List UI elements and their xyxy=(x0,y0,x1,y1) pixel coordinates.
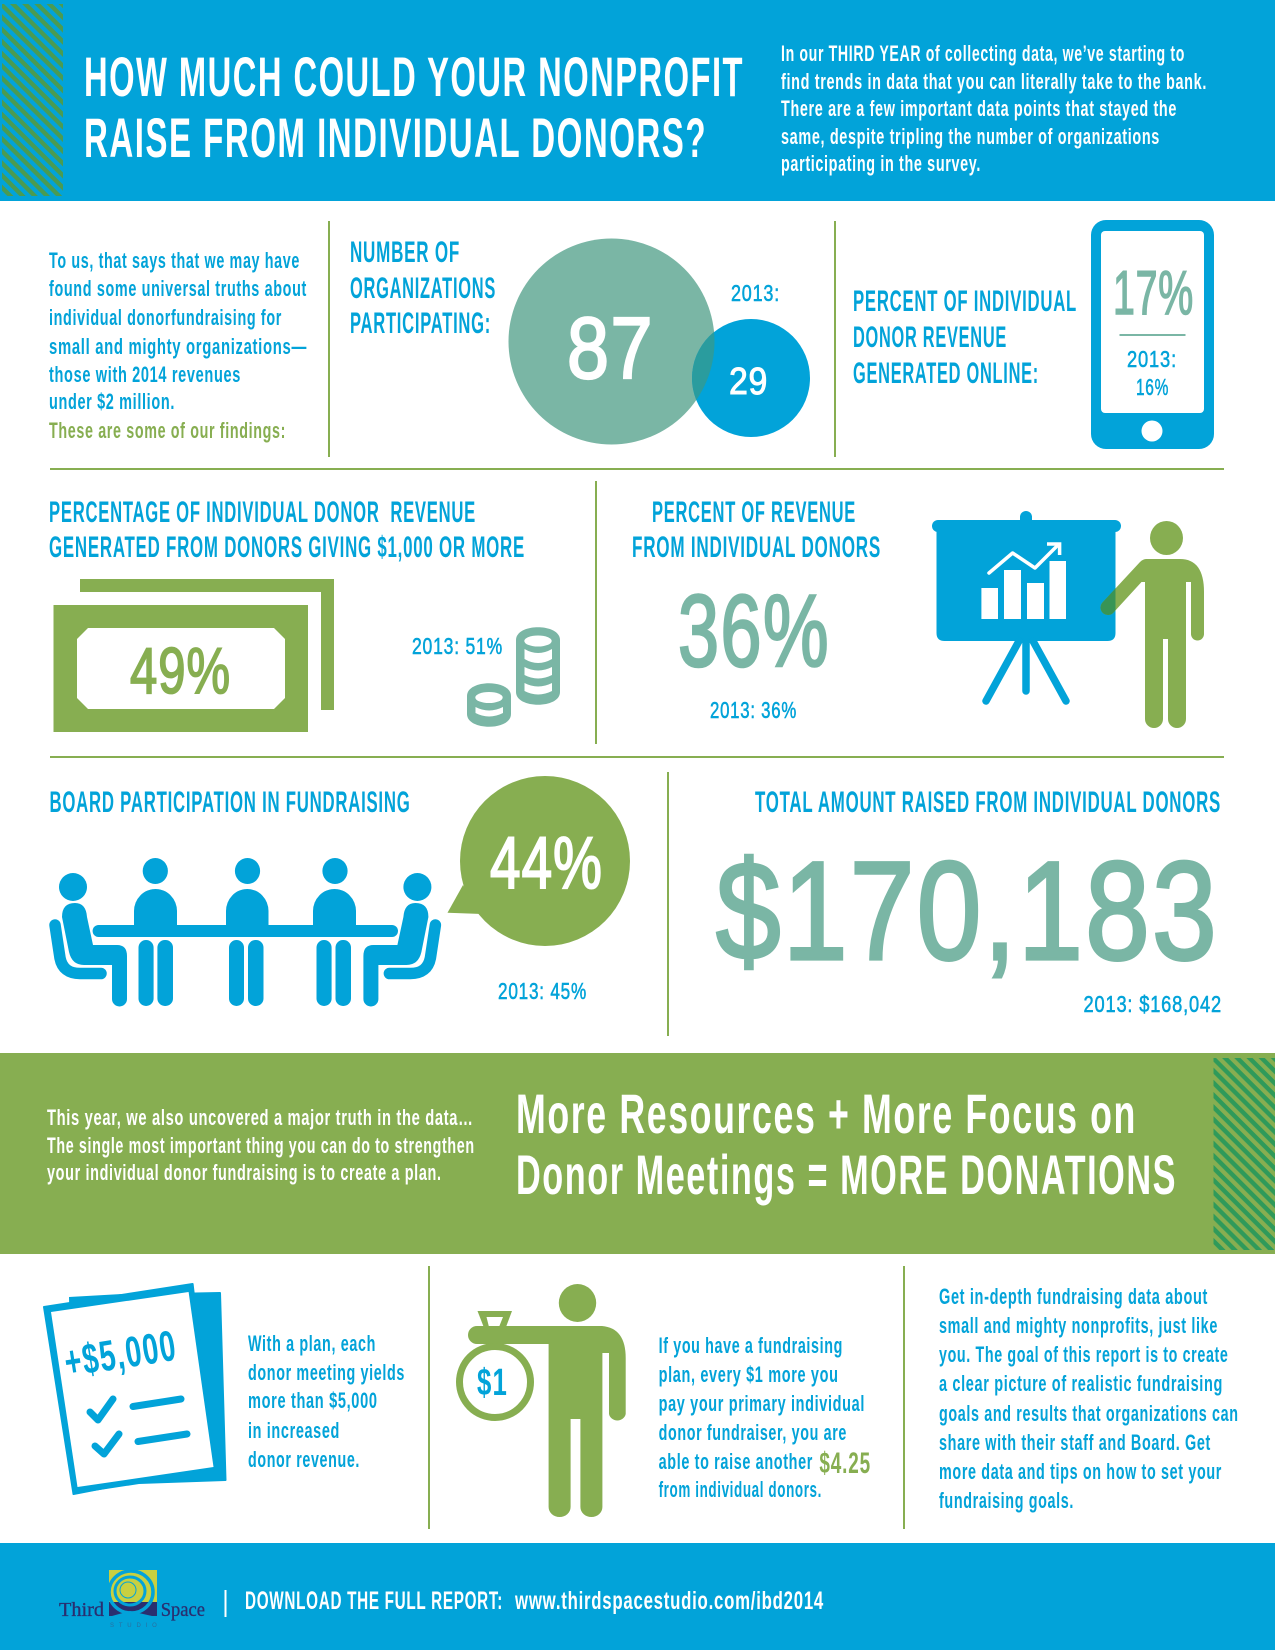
text block: in-depth data: fundraising goals. xyxy=(939,1488,1074,1513)
header band xyxy=(0,0,1275,201)
panel: fundraiser pay xyxy=(460,1284,871,1517)
heading: organizations: PARTICIPATING: xyxy=(350,307,491,340)
header intro text: participating in the survey. xyxy=(781,151,981,176)
header intro text xyxy=(781,41,1207,176)
icon: person holding money bag: $1 xyxy=(477,1362,508,1404)
text: $4.25 return: pay your primary individual xyxy=(659,1391,865,1416)
text: $4.25 return xyxy=(659,1333,871,1502)
panel: percent online xyxy=(853,220,1214,449)
heading: percent online xyxy=(853,285,1077,390)
heading: percent of revenue xyxy=(632,496,881,564)
text: $5,000 per meeting: donor meeting yields xyxy=(248,1360,405,1385)
text block: in-depth data xyxy=(939,1284,1239,1513)
figure: 36%: 36% xyxy=(678,574,830,688)
text: $4.25 return: able to raise another xyxy=(659,1449,813,1474)
label: 2013 36%: 2013: 36% xyxy=(710,697,797,723)
logo: Third Space Studio: Third xyxy=(59,1599,104,1621)
icon: presentation board xyxy=(932,511,1121,701)
text: major truth: This year, we also uncovered a major truth in the data… xyxy=(47,1105,474,1130)
icon: banknotes with 49% xyxy=(54,579,334,732)
icon: checklist document: +$5,000 xyxy=(61,1322,180,1387)
download call to action: DOWNLOAD THE FULL REPORT: xyxy=(245,1587,503,1615)
panel: percent of revenue from individual donors xyxy=(632,496,1204,728)
text: $4.25 return: donor fundraiser, you are xyxy=(659,1420,847,1445)
intro paragraph: under $2 million. xyxy=(49,389,175,414)
intro paragraph xyxy=(49,248,307,443)
label: 2013: 2013: xyxy=(731,280,780,306)
text: $5,000 per meeting: in increased xyxy=(248,1418,340,1443)
heading: organizations xyxy=(350,236,496,340)
text: major truth: your individual donor fundraising is to create a plan. xyxy=(47,1160,442,1185)
text: $4.25 return: $4.25 xyxy=(819,1447,871,1480)
heading: $1,000 donors: PERCENTAGE OF INDIVIDUAL DONOR REVENUE xyxy=(49,496,476,529)
label: 2013 51%: 2013: 51% xyxy=(412,633,503,659)
heading: organizations: ORGANIZATIONS xyxy=(350,272,496,305)
icon: presenter figure xyxy=(1100,521,1204,728)
icon: smartphone with figures: 16% xyxy=(1136,374,1169,400)
panel: plan yields more xyxy=(44,1284,405,1494)
footer band xyxy=(0,1543,1275,1650)
icon: person holding money bag xyxy=(460,1284,626,1517)
text: $5,000 per meeting: With a plan, each xyxy=(248,1331,376,1356)
heading: percent of revenue: PERCENT OF REVENUE xyxy=(652,496,856,529)
headline: more donations xyxy=(516,1082,1177,1206)
heading: percent online: PERCENT OF INDIVIDUAL xyxy=(853,285,1077,318)
title: HOW MUCH COULD YOUR NONPROFIT xyxy=(84,45,744,108)
text: $5,000 per meeting: donor revenue. xyxy=(248,1447,360,1472)
text: $4.25 return: plan, every $1 more you xyxy=(659,1362,839,1387)
circle: 29 organizations in 2013: 29 xyxy=(729,361,768,403)
intro paragraph: those with 2014 revenues xyxy=(49,362,241,387)
intro paragraph: These are some of our findings: xyxy=(49,418,286,443)
title: RAISE FROM INDIVIDUAL DONORS? xyxy=(84,106,707,169)
title xyxy=(84,45,744,169)
logo: Third Space Studio xyxy=(59,1570,205,1629)
speech bubble: 44% xyxy=(448,776,630,946)
panel: number of organizations participating xyxy=(350,236,810,444)
text: $5,000 per meeting: more than $5,000 xyxy=(248,1388,378,1413)
intro paragraph: small and mighty organizations— xyxy=(49,334,307,359)
text: $4.25 return: from individual donors. xyxy=(659,1477,822,1502)
logo: Third Space Studio: STUDIO xyxy=(110,1623,157,1629)
heading: $1,000 donors xyxy=(49,496,525,564)
green band: key finding xyxy=(0,1053,1275,1254)
circle: 29 organizations in 2013 xyxy=(692,319,810,437)
icon: banknotes with 49%: 49% xyxy=(130,634,231,707)
heading: percent online: DONOR REVENUE xyxy=(853,321,1007,354)
panel: donors giving $1,000 or more xyxy=(49,496,560,732)
logo: Third Space Studio: Space xyxy=(161,1599,205,1621)
heading: $1,000 donors: GENERATED FROM DONORS GIVING $1,000 OR MORE xyxy=(49,531,525,564)
heading: board participation: BOARD PARTICIPATION IN FUNDRAISING xyxy=(50,786,410,819)
intro paragraph: individual donorfundraising for xyxy=(49,305,282,330)
icon: smartphone with figures: 2013: xyxy=(1127,346,1177,372)
icon: checklist document xyxy=(44,1284,226,1494)
label: 2013 45%: 2013: 45% xyxy=(498,978,587,1004)
heading: percent of revenue: FROM INDIVIDUAL DONORS xyxy=(632,531,881,564)
text: $4.25 return: If you have a fundraising xyxy=(659,1333,843,1358)
speech bubble: 44%: 44% xyxy=(490,823,603,904)
panel: total amount raised xyxy=(716,786,1222,1017)
icon: coins xyxy=(467,627,560,727)
heading: percent online: GENERATED ONLINE: xyxy=(853,357,1039,390)
icon: smartphone with figures: 17% xyxy=(1113,259,1194,328)
intro paragraph: To us, that says that we may have xyxy=(49,248,300,273)
text: major truth: The single most important thing you can do to strengthen xyxy=(47,1133,475,1158)
download call to action: www.thirdspacestudio.com/ibd2014 xyxy=(514,1587,824,1615)
text: $5,000 per meeting xyxy=(248,1331,405,1472)
intro paragraph: found some universal truths about xyxy=(49,276,307,301)
circle: 87 organizations: 87 xyxy=(567,300,654,397)
circle: 87 organizations xyxy=(508,238,714,444)
heading: organizations: NUMBER OF xyxy=(350,236,460,269)
panel: board participation xyxy=(50,776,630,1007)
icon: people at meeting table xyxy=(55,858,435,1007)
icon: smartphone with figures xyxy=(1091,220,1214,449)
text: major truth xyxy=(47,1105,475,1185)
label: 2013 $168,042: 2013: $168,042 xyxy=(1084,991,1222,1017)
